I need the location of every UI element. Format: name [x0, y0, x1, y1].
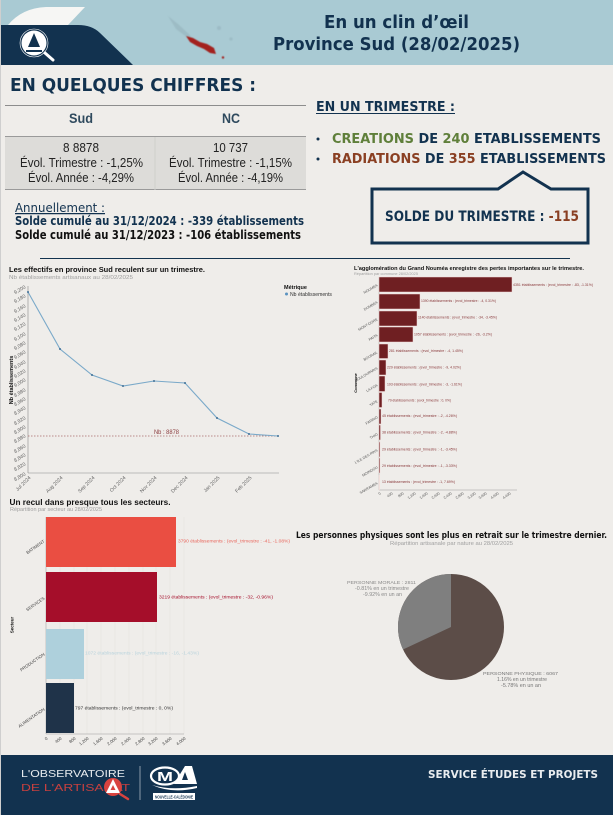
x axis labels: 4,400 — [502, 492, 512, 500]
x axis labels: 2,000 — [431, 492, 441, 500]
x axis labels: 1,600 — [92, 735, 104, 746]
label: personne morale: -9.92% en un an — [363, 592, 402, 598]
category labels — [17, 539, 46, 729]
x axis labels: 2,400 — [443, 492, 453, 500]
pie chart: personnes physiques et morales: Répartition artisanale par nature au 28/02/2025 — [390, 541, 513, 547]
label: personne physique: 1.16% en un trimestre — [497, 677, 547, 683]
value labels: 1390 établissements : (evol_trimestre : -4, 0.31%) — [421, 299, 496, 303]
y axis labels: 9,000 — [13, 377, 27, 389]
x axis labels: Sep 2024 — [77, 475, 97, 495]
y axis labels: 9,180 — [13, 293, 27, 305]
x axis labels: 1,600 — [419, 492, 429, 500]
y axis labels: 9,060 — [13, 349, 27, 361]
table: Sud and NC key figures: Sud — [69, 110, 93, 126]
logo: observatoire de l'artisanat: DE L'ARTISANAT — [21, 782, 131, 794]
category labels: PRODUCTION — [19, 652, 46, 672]
label: personne physique — [483, 671, 558, 689]
table: Sud and NC key figures: Évol. Trimestre : -1,25% — [20, 155, 143, 170]
bars — [379, 277, 512, 490]
table: Sud and NC key figures: 8 8878 — [63, 141, 99, 155]
y axis title: Secteur — [10, 617, 14, 633]
category labels: MOINDOU — [361, 465, 379, 478]
table: Sud and NC key figures: NC — [222, 110, 240, 126]
x axis labels — [378, 492, 512, 500]
data line — [27, 291, 279, 437]
category labels: BOURAIL — [363, 350, 378, 362]
category labels: BOULOUPARIS — [354, 366, 379, 383]
value labels: 79 établissements : (evol_trimestre : 0, 0%) — [388, 398, 451, 402]
x axis labels: 2,000 — [106, 735, 118, 746]
table: Sud and NC key figures: Évol. Année : -4,19% — [178, 170, 283, 185]
category labels: NOUMEA — [363, 283, 379, 295]
value labels: 29 établissements : (evol_trimestre : -1, -3.45%) — [382, 447, 457, 451]
label: personne physique: PERSONNE PHYSIQUE : 6067 — [483, 671, 558, 677]
x axis labels: Feb 2025 — [234, 475, 254, 494]
value labels: 193 établissements : (evol_trimestre : -3, -1.61%) — [387, 382, 462, 386]
x axis labels — [44, 735, 187, 746]
line chart: effectifs: Nb établissements artisanaux au 28/02/2025 — [9, 275, 133, 281]
category labels: YATE — [369, 399, 379, 407]
x axis labels: 3,200 — [147, 735, 159, 746]
icon: map of New Caledonia — [168, 16, 233, 59]
category labels — [354, 283, 379, 495]
category labels: LA FOA — [366, 383, 379, 393]
y axis labels: 8,840 — [13, 452, 27, 464]
bar chart: communes: L'agglomération du Grand Nouméa enregistre des pertes importantes sur le trimestre. — [354, 266, 584, 272]
table: Sud and NC key figures — [5, 106, 306, 190]
label: personne morale: -0.81% en un trimestre — [355, 586, 409, 592]
x axis labels: 4,000 — [490, 492, 500, 500]
category labels: SERVICES — [25, 596, 46, 612]
header banner — [1, 0, 613, 65]
legend: Nb établissements — [290, 292, 332, 298]
y axis labels: 8,920 — [13, 415, 27, 427]
annual balance text block: Solde cumulé au 31/12/2024 : -339 établissements — [15, 213, 304, 228]
annual balance text block: Annuellement : — [15, 200, 105, 215]
value labels: 1140 établissements : (evol_trimestre : -34, -3.45%) — [418, 316, 497, 320]
x axis labels: Aug 2024 — [45, 475, 65, 495]
x axis labels: 4,000 — [175, 735, 187, 746]
value labels: 4351 établissements : (evol_trimestre : -83, -1.31%) — [513, 283, 593, 287]
y axis labels: 9,160 — [13, 303, 27, 315]
y axis title: Commune — [353, 372, 358, 393]
y axis labels: 8,900 — [13, 424, 27, 436]
x axis labels: 400 — [386, 492, 394, 498]
x axis labels: 3,600 — [161, 735, 173, 746]
y axis labels: 9,040 — [13, 359, 27, 371]
navy header tab — [1, 25, 133, 65]
logo: CMA Nouvelle-Calédonie: NOUVELLE-CALÉDONIE — [155, 792, 193, 800]
y axis labels: 8,940 — [13, 405, 27, 417]
y axis labels: 8,800 — [13, 471, 27, 483]
x axis labels: 0 — [378, 492, 382, 496]
x axis labels — [15, 475, 254, 495]
value labels: 797 établissements : (evol_trimestre : 0, 0%) — [75, 706, 173, 711]
legend — [284, 285, 332, 298]
y axis title: Nb établissements — [9, 356, 15, 404]
logo: observatoire de l'artisanat — [21, 768, 131, 799]
heading: en un trimestre: EN UN TRIMESTRE : — [316, 99, 455, 115]
table: Sud and NC key figures: Évol. Année : -4,29% — [28, 170, 134, 185]
reference line: Nb : 8878 — [154, 430, 180, 436]
category labels: MONT-DORE — [357, 317, 379, 332]
value labels: 3790 établissements : (evol_trimestre : -41, -1.08%) — [178, 539, 290, 544]
x axis labels: 3,200 — [467, 492, 477, 500]
pie chart: personnes physiques et morales — [296, 531, 607, 689]
title: Province Sud (28/02/2025) — [273, 34, 520, 55]
label: personne morale: PERSONNE MORALE : 2811 — [347, 580, 416, 586]
value labels: 1057 établissements : (evol_trimestre : -26, -3.2%) — [414, 332, 492, 336]
annual balance text block — [15, 200, 304, 242]
icon: magnifier logo — [20, 29, 53, 60]
service label: SERVICE ÉTUDES ET PROJETS — [428, 768, 598, 781]
table: Sud and NC key figures: 10 737 — [213, 141, 248, 155]
callout: solde du trimestre — [372, 172, 588, 243]
value labels: 45 établissements : (evol_trimestre : -2, -4.26%) — [382, 414, 457, 418]
legend: Métrique — [284, 285, 307, 291]
category labels: L'ILE DES PINS — [354, 448, 379, 465]
y axis labels: 8,860 — [13, 443, 27, 455]
y axis labels: 9,080 — [13, 340, 27, 352]
y axis labels: 9,100 — [13, 331, 27, 343]
icon: white swoosh — [8, 7, 85, 25]
x axis labels: 2,800 — [134, 735, 146, 746]
logo: CMA Nouvelle-Calédonie — [151, 766, 197, 800]
y axis labels: 8,820 — [13, 461, 27, 473]
label: personne physique: -5.78% en un an — [501, 683, 541, 689]
category labels: FARINO — [365, 415, 379, 426]
footer — [1, 755, 613, 815]
callout: solde du trimestre: SOLDE DU TRIMESTRE : -115 — [385, 209, 579, 225]
logo: CMA Nouvelle-Calédonie: M — [157, 769, 173, 784]
value labels: 38 établissements : (evol_trimestre : -2, -4.88%) — [382, 430, 457, 434]
value labels: 13 établissements : (evol_trimestre : -1, 7.69%) — [382, 480, 455, 484]
value labels: 1072 établissements : (evol_trimestre : -16, -1.43%) — [85, 651, 200, 656]
y axis labels: 9,140 — [13, 312, 27, 324]
y axis labels: 9,020 — [13, 368, 27, 380]
y axis labels: 8,960 — [13, 396, 27, 408]
bar chart: communes: Répartition par commune 28/02/2025 — [354, 272, 418, 276]
line chart: effectifs — [9, 265, 332, 495]
y axis labels — [13, 284, 27, 483]
bar chart: secteurs: Répartition par secteur au 28/02/2025 — [10, 507, 102, 513]
title — [273, 12, 520, 55]
pie — [398, 574, 504, 680]
x axis labels: 2,800 — [455, 492, 465, 500]
x axis labels: 3,600 — [478, 492, 488, 500]
label: personne morale — [347, 580, 416, 598]
x axis labels: Dec 2024 — [170, 475, 190, 495]
value labels — [75, 539, 290, 711]
category labels: THIO — [369, 432, 379, 440]
bar chart: secteurs: Un recul dans presque tous les secteurs. — [10, 498, 170, 507]
x axis labels: Jan 2025 — [203, 475, 222, 494]
category labels: SARRAMEA — [359, 481, 379, 495]
category labels: ALIMENTATION — [17, 707, 46, 729]
bar chart: communes — [353, 266, 593, 500]
category labels: PAITA — [368, 333, 379, 342]
x axis labels: 800 — [397, 492, 405, 498]
title: En un clin d’œil — [324, 12, 469, 33]
list: creations and radiations — [316, 132, 606, 167]
x axis labels: Jul 2024 — [15, 475, 33, 493]
x axis labels: 400 — [54, 735, 63, 744]
value labels: 29 établissements : (evol_trimestre : -1, -3.33%) — [382, 464, 457, 468]
annual balance text block: Solde cumulé au 31/12/2023 : -106 établissements — [15, 227, 301, 242]
value labels: 281 établissements : (evol_trimestre : -4, 1.45%) — [389, 349, 463, 353]
grid lines — [60, 517, 184, 734]
list: creations and radiations: CREATIONS DE 240 ETABLISSEMENTS — [332, 132, 601, 147]
x axis labels: 2,400 — [120, 735, 132, 746]
table: Sud and NC key figures: Évol. Trimestre : -1,15% — [169, 155, 292, 170]
x axis labels: 800 — [68, 735, 77, 744]
logo: observatoire de l'artisanat: L'OBSERVATOIRE — [21, 768, 125, 780]
x axis labels: 1,200 — [78, 735, 90, 746]
value labels: 3219 établissements : (evol_trimestre : -32, -0.96%) — [159, 595, 274, 600]
category labels: DUMBEA — [363, 300, 379, 312]
y axis labels: 8,880 — [13, 433, 27, 445]
value labels: 229 établissements : (evol_trimestre : -9, 4.02%) — [387, 366, 461, 370]
bars — [46, 517, 176, 733]
list: creations and radiations: RADIATIONS DE 355 ETABLISSEMENTS — [332, 152, 606, 167]
value labels — [382, 283, 593, 484]
heading: en quelques chiffres: EN QUELQUES CHIFFRES : — [10, 76, 256, 96]
bar chart: secteurs — [10, 498, 290, 746]
y axis labels: 9,120 — [13, 321, 27, 333]
category labels: BATIMENT — [25, 539, 46, 555]
y axis labels: 9,200 — [13, 284, 27, 296]
x axis labels: 1,200 — [407, 492, 417, 500]
line chart: effectifs: Les effectifs en province Sud reculent sur un trimestre. — [9, 265, 205, 274]
x axis labels: Nov 2024 — [139, 475, 159, 495]
x axis labels: 0 — [44, 735, 49, 741]
y axis labels: 8,980 — [13, 387, 27, 399]
x axis labels: Oct 2024 — [109, 475, 128, 494]
